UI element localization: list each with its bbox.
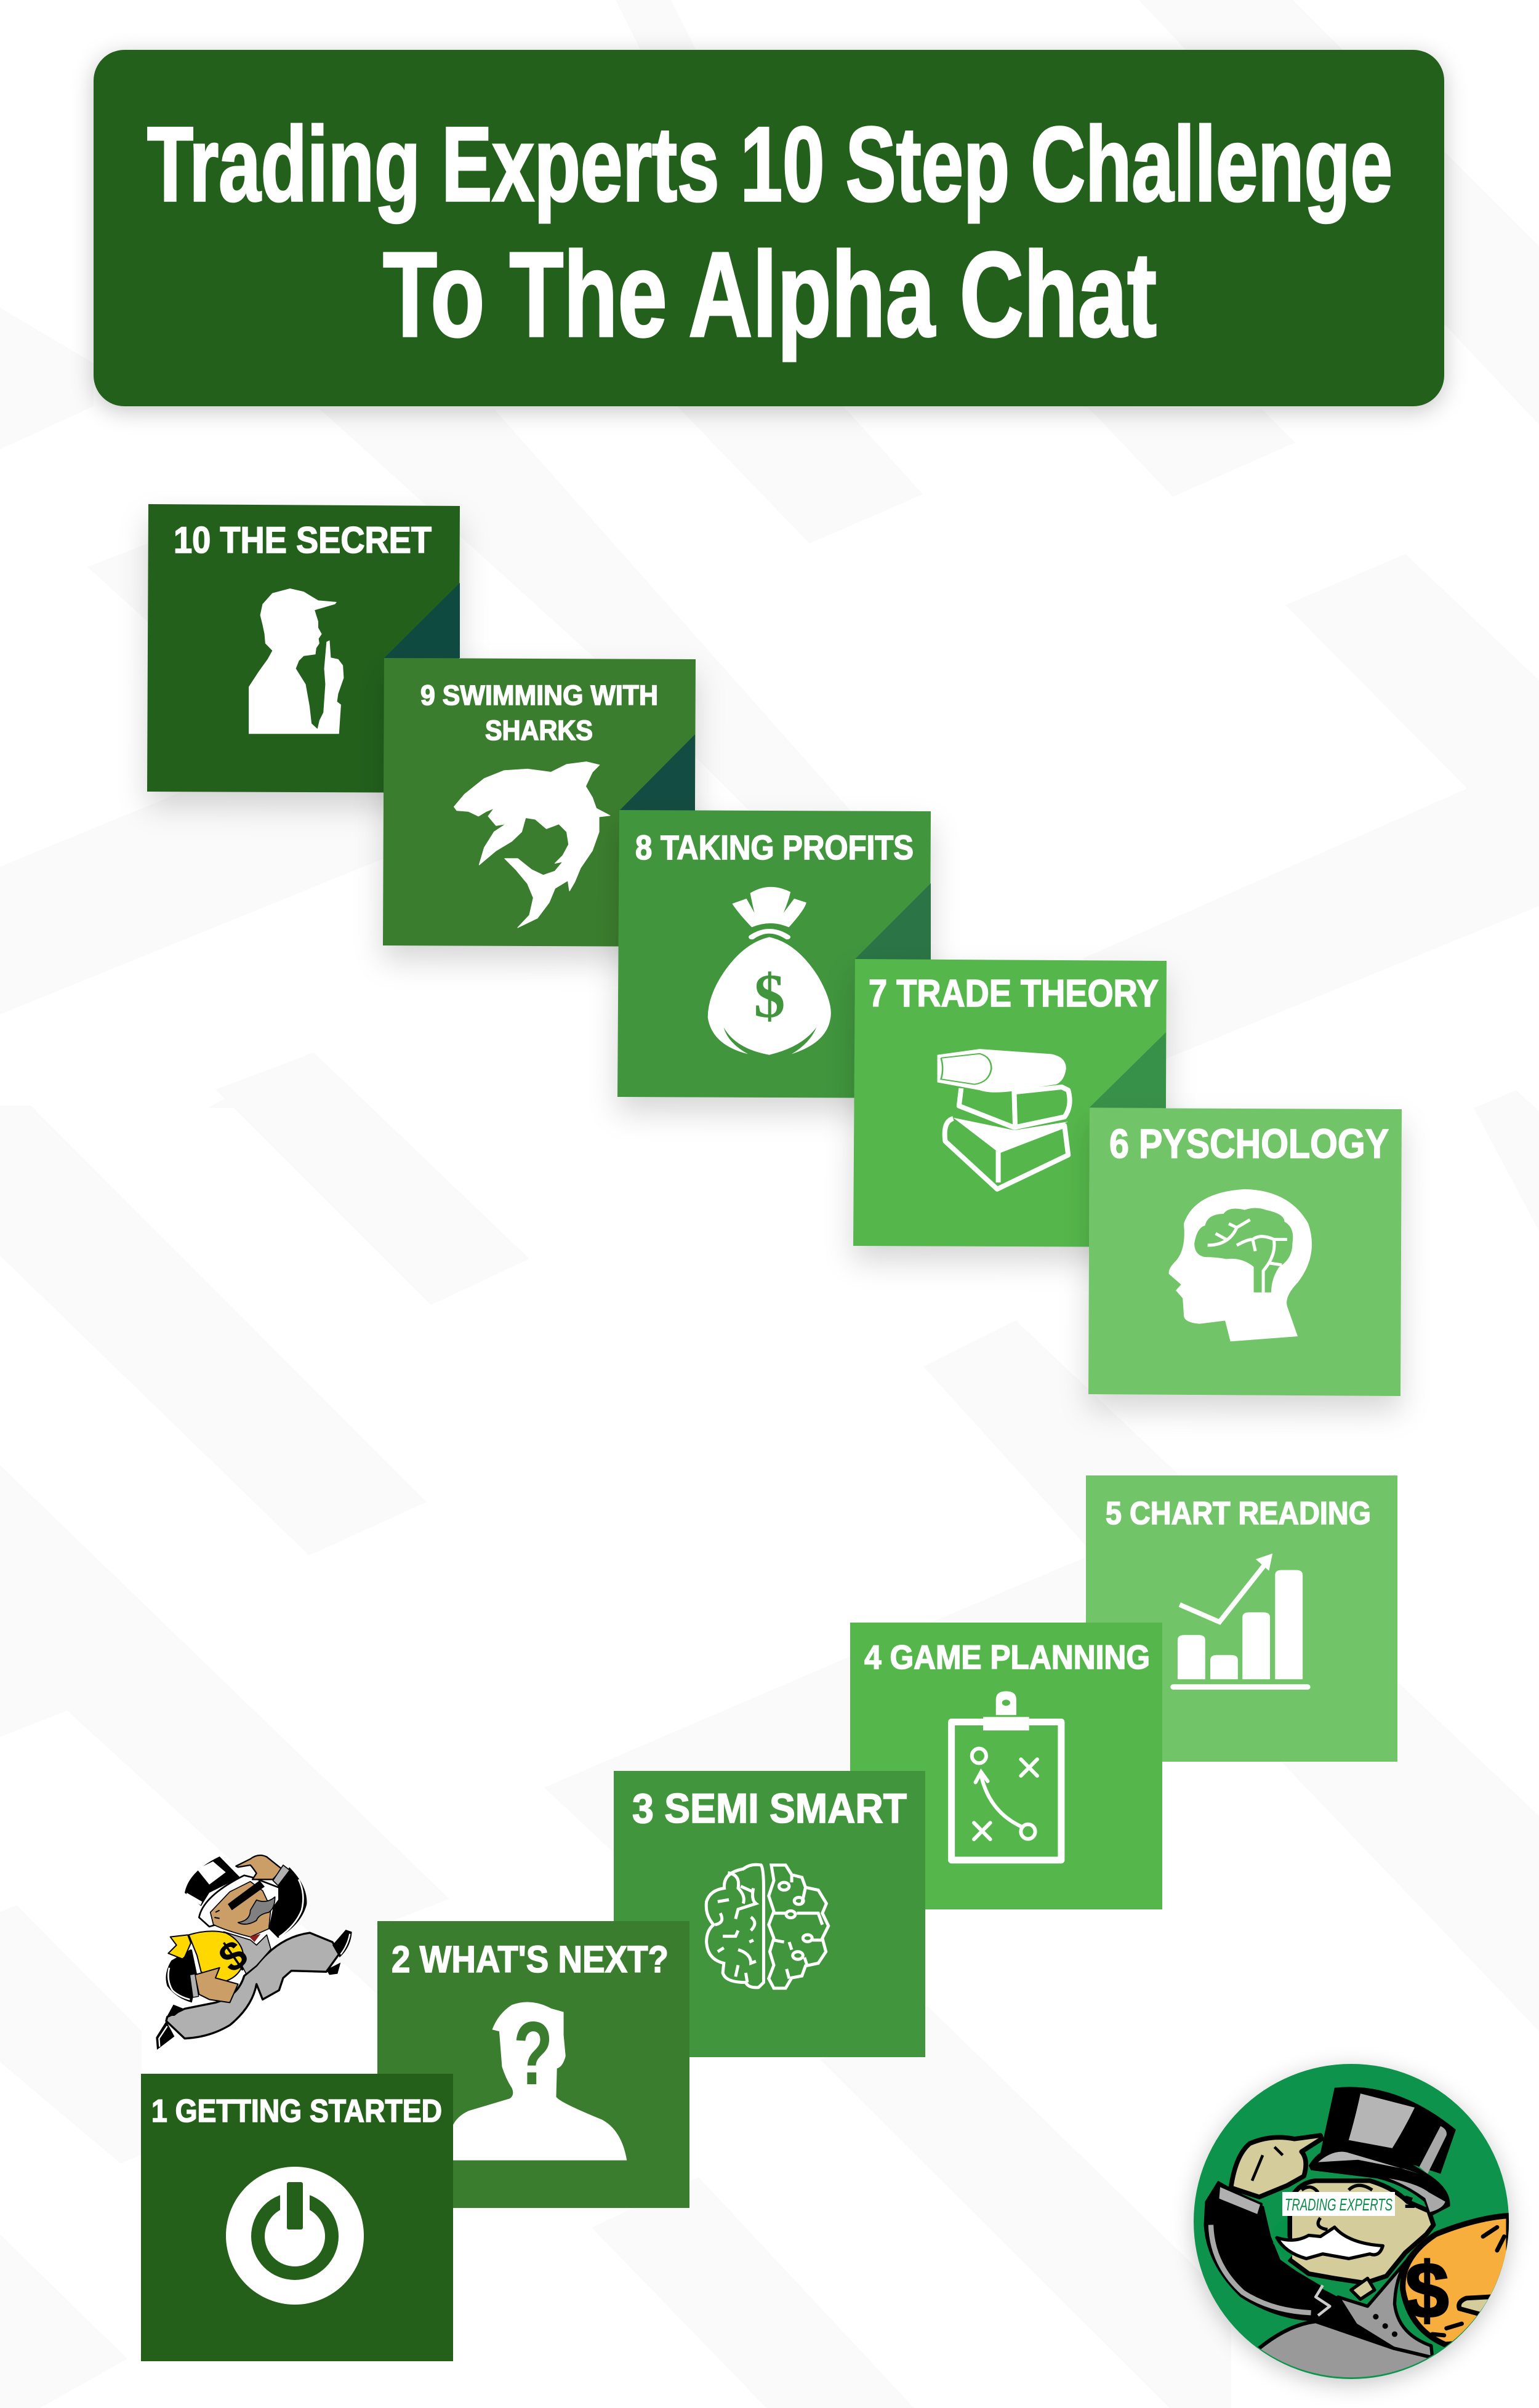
card 4: game planning (850, 1623, 1162, 1909)
label: 1 GETTING STARTED (151, 2093, 442, 2129)
logo name plate: TRADING EXPERTS (1285, 2195, 1392, 2214)
card 1: getting started (141, 2074, 453, 2361)
icon: clipboard with play diagram (952, 1692, 1061, 1860)
label: 3 SEMI SMART (632, 1785, 907, 1832)
icon: money bag (708, 887, 831, 1055)
fold corner (855, 883, 931, 960)
icon: person with question mark: ? (513, 2003, 553, 2103)
title banner (94, 50, 1444, 406)
card 9: swimming with sharks (383, 658, 696, 947)
icon: stack of books (938, 1049, 1070, 1189)
card 5: chart reading (1086, 1475, 1397, 1762)
label: 2 WHAT'S NEXT? (392, 1938, 669, 1980)
label: 7 TRADE THEORY (869, 973, 1159, 1015)
small running mascot (156, 1855, 352, 2050)
icon: person shushing (249, 588, 344, 734)
label: 9 SWIMMING WITH (420, 680, 658, 711)
label: 5 CHART READING (1106, 1496, 1371, 1531)
card 10: the secret (147, 504, 460, 793)
card 2: what's next (377, 1921, 689, 2208)
icon: bar chart with arrow (1170, 1554, 1311, 1690)
label: 10 THE SECRET (174, 520, 432, 561)
icon: power button (226, 2167, 364, 2305)
label: 4 GAME PLANNING (864, 1638, 1150, 1676)
fold corner (1090, 1032, 1166, 1108)
fold corner (384, 583, 460, 658)
icon: head with brain (1169, 1189, 1312, 1341)
card 7: trade theory (853, 959, 1167, 1247)
label: 6 PYSCHOLOGY (1109, 1121, 1389, 1167)
round logo badge (1194, 2064, 1509, 2392)
label second line: SHARKS (485, 715, 593, 746)
dollar sign on coin bag: $ (1405, 2247, 1449, 2335)
logo name plate (1282, 2192, 1395, 2216)
label: 8 TAKING PROFITS (635, 828, 914, 867)
card 3: semi smart (614, 1771, 925, 2057)
title line 2: To The Alpha Chat (383, 227, 1157, 362)
card 8: taking profits (617, 810, 931, 1098)
small running mascot: $ (211, 1932, 255, 1982)
fold corner (620, 734, 695, 811)
icon: money bag: $ (753, 961, 786, 1031)
card 6: psychology (1088, 1108, 1402, 1396)
icon: shark (454, 762, 610, 928)
icon: person with question mark (452, 2002, 627, 2161)
icon: circuit brain (706, 1864, 829, 1988)
